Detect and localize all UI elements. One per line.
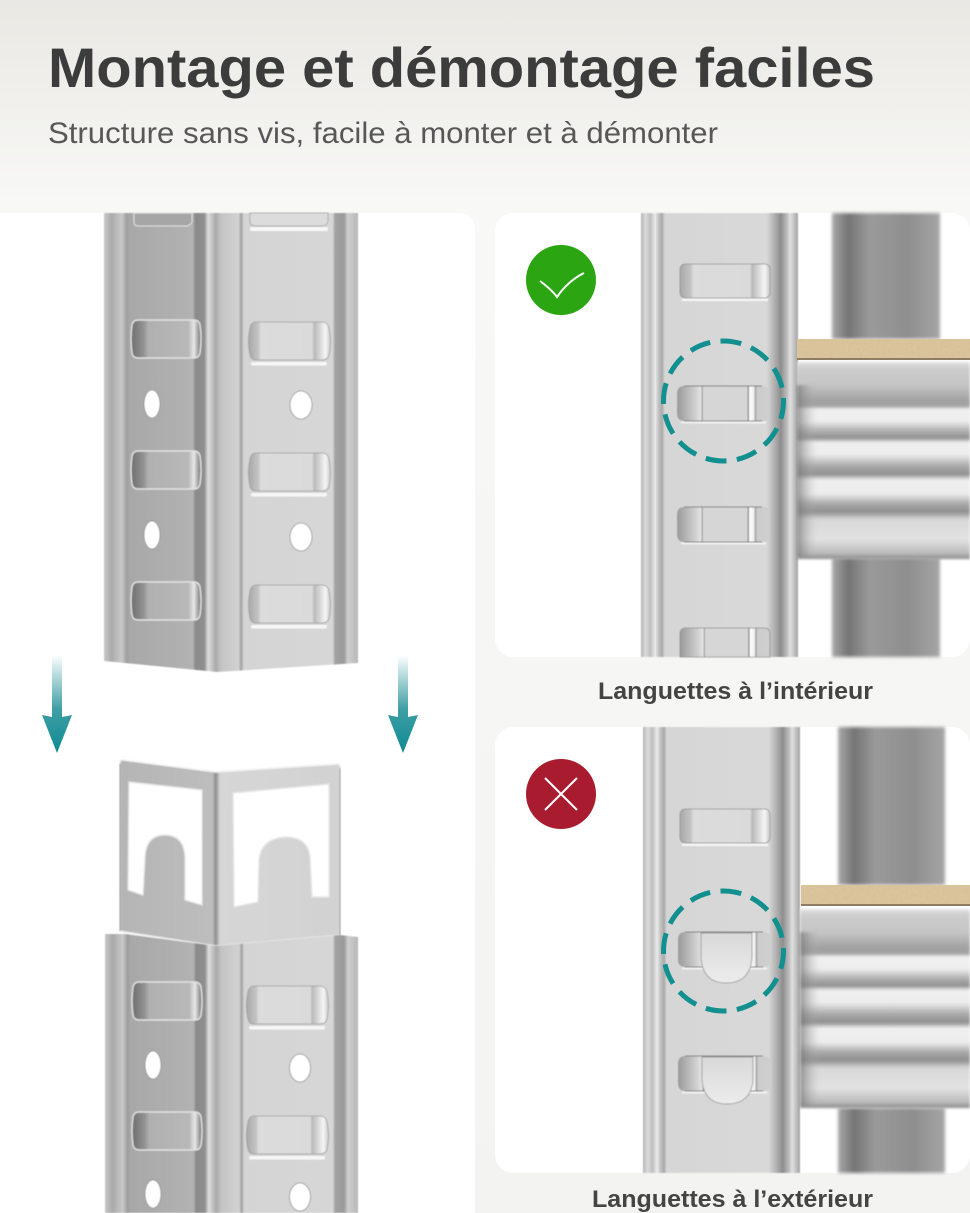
panel: tabs outside (incorrect) xyxy=(495,727,970,1173)
holes on lower post xyxy=(145,1051,310,1211)
slots xyxy=(680,264,770,301)
shelf board xyxy=(801,885,970,906)
panel: tabs inside (correct) xyxy=(495,213,970,657)
arrow: right down xyxy=(388,655,418,753)
shelf beam xyxy=(800,909,970,1108)
front post xyxy=(641,213,798,657)
slots on lower post xyxy=(132,982,328,1160)
icon: red cross xyxy=(526,759,596,829)
shelf board xyxy=(797,339,970,360)
icon: green check xyxy=(526,245,596,315)
slots on upper post xyxy=(131,213,330,628)
shelf beam xyxy=(797,362,970,559)
front post xyxy=(643,727,800,1173)
dashed circle highlight xyxy=(664,341,784,461)
panel: left assembly view xyxy=(0,213,475,1213)
slots xyxy=(680,809,770,846)
lower post xyxy=(105,934,358,1213)
back post xyxy=(838,727,945,1173)
upper post xyxy=(104,213,358,672)
caption: tabs outside: Languettes à l’extérieur xyxy=(592,1186,873,1213)
dashed circle highlight xyxy=(664,891,784,1011)
connector tabs xyxy=(120,760,340,946)
back post xyxy=(832,213,940,657)
arrow: left down xyxy=(42,655,72,753)
tongues xyxy=(701,933,753,1104)
caption: tabs inside: Languettes à l’intérieur xyxy=(598,678,873,705)
subtitle: Structure sans vis, facile à monter et à démonter xyxy=(48,117,718,150)
holes on upper post xyxy=(144,390,312,551)
title: Montage et démontage faciles xyxy=(48,36,875,99)
